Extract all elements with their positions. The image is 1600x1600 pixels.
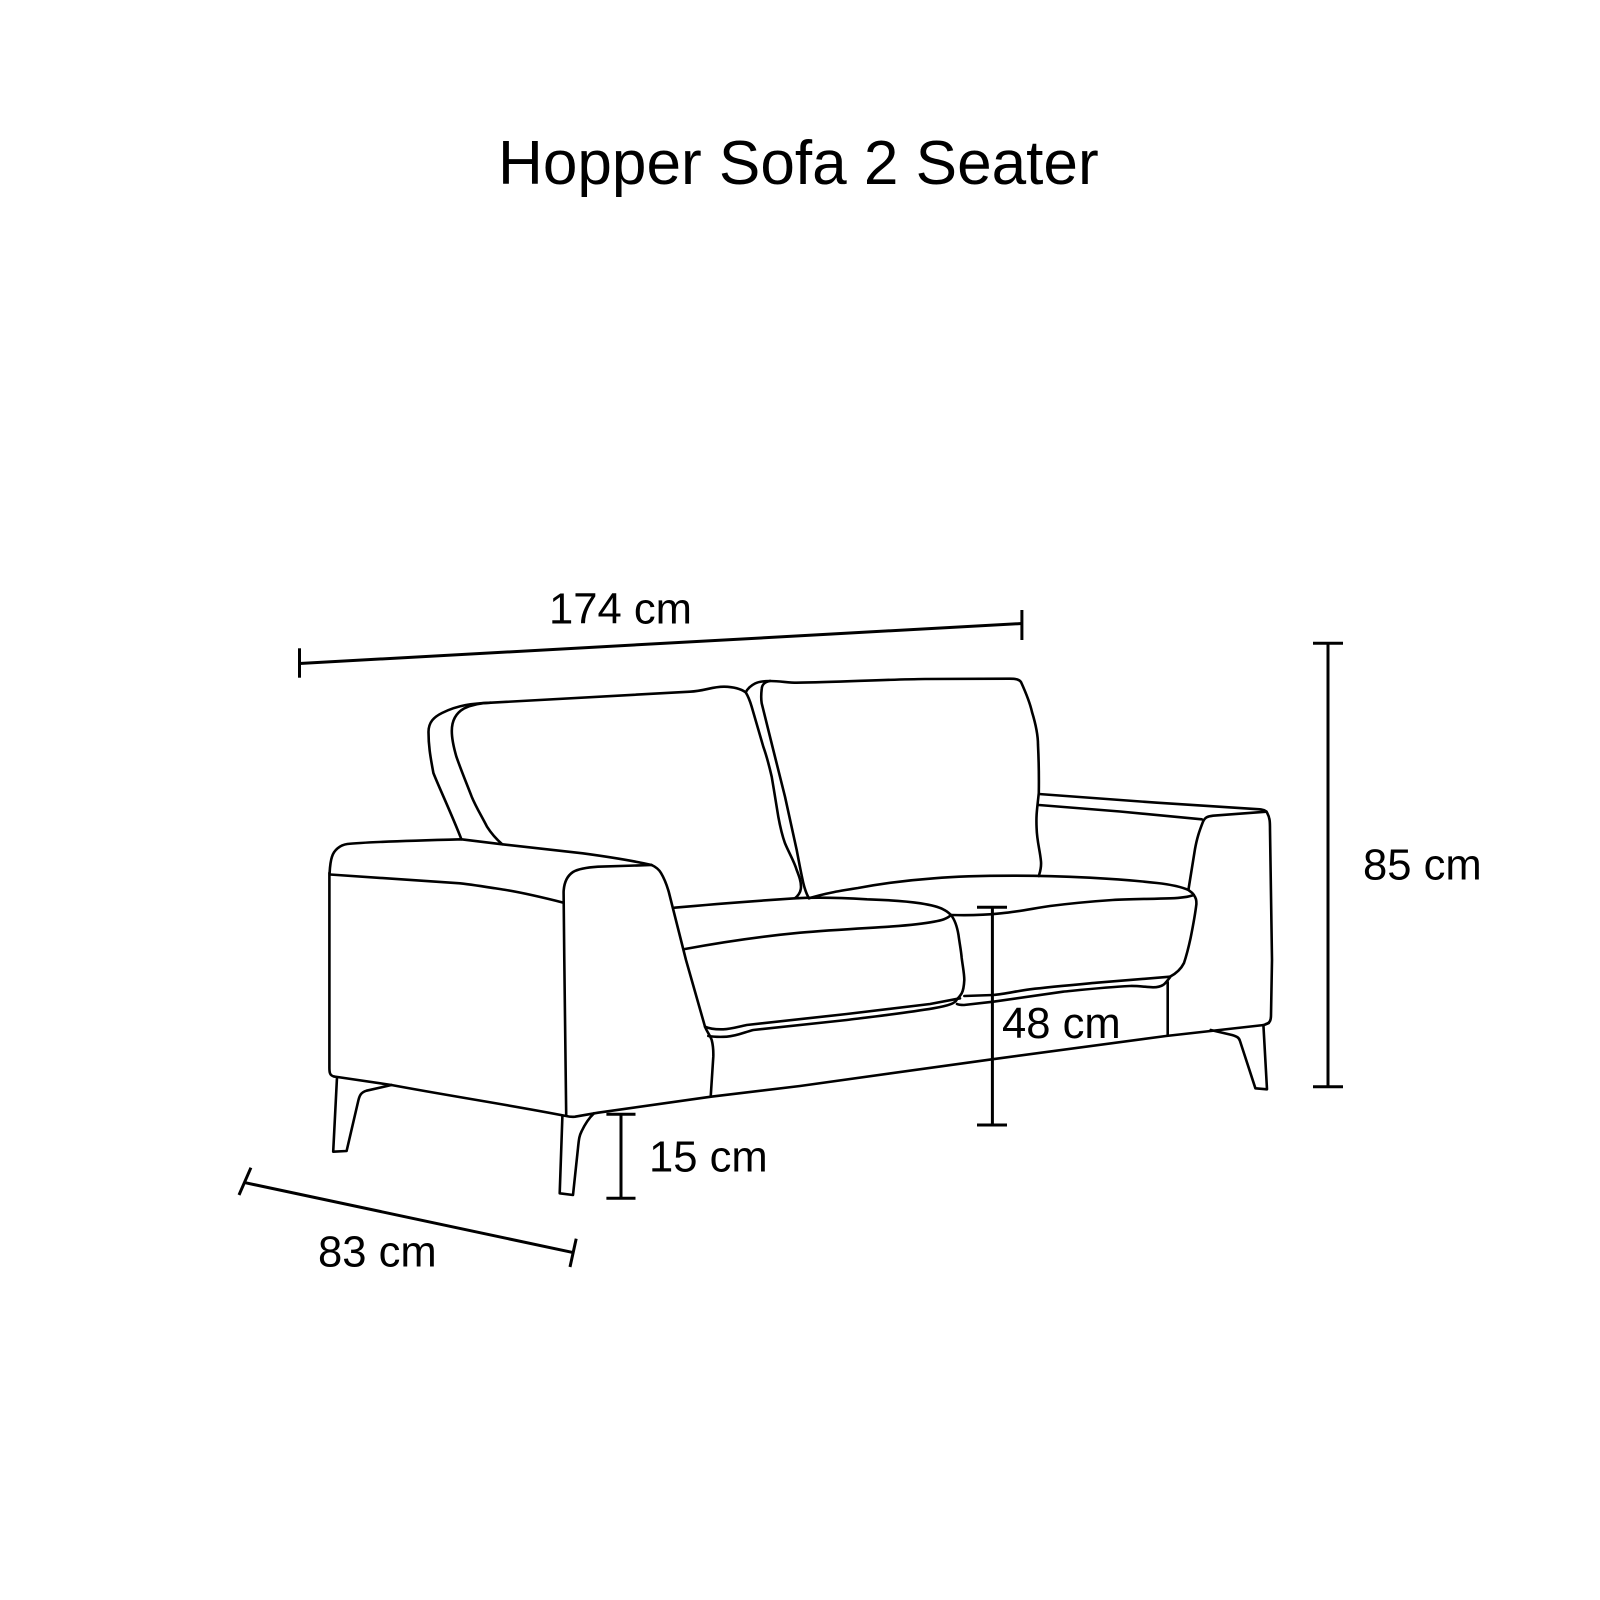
dimension label: 174 cm: 174 cm (549, 586, 692, 634)
sofa line drawing (329, 679, 1272, 1195)
title: Hopper Sofa 2 Seater (498, 129, 1099, 198)
left seat cushion (674, 898, 964, 1037)
dimension: seat height 48 cm (977, 907, 1007, 1125)
sofa base line (334, 1023, 1269, 1117)
dimension: width 174 cm (300, 610, 1022, 678)
dimension: height 85 cm (1313, 643, 1343, 1087)
right back cushion (746, 679, 1041, 898)
back left leg (333, 1077, 391, 1152)
right leg (1211, 1025, 1267, 1089)
right seat cushion (809, 876, 1196, 1005)
dimension label: 85 cm: 85 cm (1363, 842, 1482, 890)
right arm (1039, 794, 1272, 1035)
dimension label: 83 cm: 83 cm (318, 1229, 437, 1277)
front left leg (560, 1113, 594, 1195)
left arm (329, 839, 713, 1115)
dimension label: 15 cm: 15 cm (649, 1134, 768, 1182)
dimension: depth 83 cm (239, 1168, 576, 1267)
dimension: leg height 15 cm (606, 1114, 636, 1198)
dimension label: 48 cm: 48 cm (1002, 1000, 1121, 1048)
left back cushion (428, 687, 801, 898)
